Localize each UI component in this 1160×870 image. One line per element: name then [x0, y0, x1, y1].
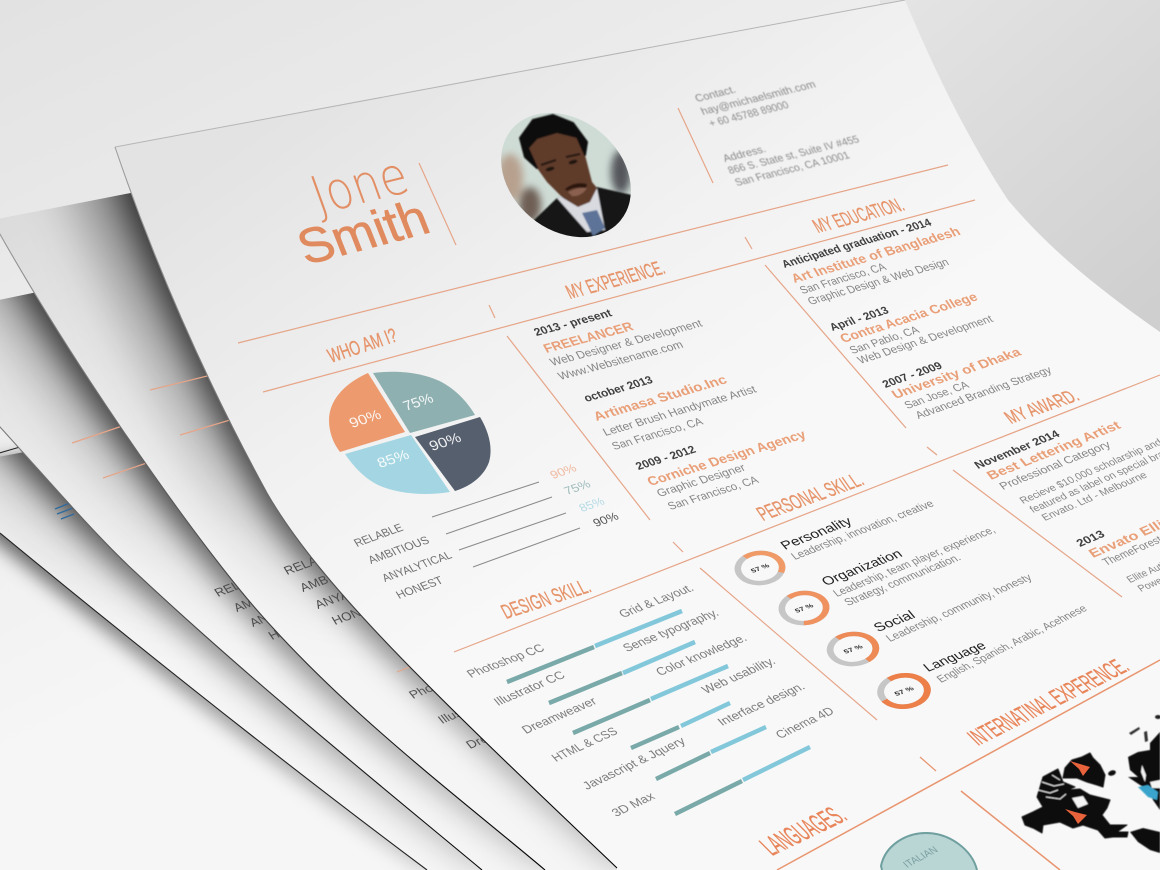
- education list: Anticipated graduation - 2014: [779, 217, 934, 271]
- design skill bars: [507, 611, 810, 814]
- back sheet 2: Photoshop: [406, 666, 473, 701]
- pie chart: 75%: [401, 391, 436, 414]
- section rules: [238, 165, 1160, 870]
- profile photo: [501, 113, 631, 238]
- experience list: FREELANCER: [541, 319, 636, 356]
- education list: Web Design & Development: [855, 313, 996, 366]
- language bubble: italian: [881, 833, 977, 870]
- trait list: AMBITIOUS: [365, 534, 432, 566]
- education list: Art Institute of Bangladesh: [788, 224, 963, 286]
- experience list: [532, 307, 809, 513]
- design skill labels: Interface design.: [714, 679, 808, 728]
- donut: personality: 57 %: [749, 562, 771, 574]
- back sheet 2: [0, 193, 604, 870]
- design skill labels: Illustrator CC: [490, 668, 568, 708]
- personal skill list: [777, 498, 1090, 685]
- trait list: [351, 461, 621, 601]
- donut: language: 57 %: [893, 685, 916, 698]
- name: Smith: [289, 189, 437, 275]
- education list: San Pablo, CA: [847, 324, 922, 356]
- heading: personal skill: PERSONAL SKILL.: [752, 468, 868, 525]
- ghost rows: blue: [55, 503, 74, 519]
- award list: Professional Category: [997, 439, 1114, 492]
- experience list: Corniche Design Agency: [644, 427, 809, 489]
- back sheet 2: Illustrator: [435, 694, 494, 726]
- design skill labels: Web usability.: [698, 654, 778, 696]
- experience list: october 2013: [582, 374, 656, 405]
- pie chart: 90%: [347, 408, 384, 431]
- education list: San Jose, CA: [902, 379, 972, 411]
- award list: [972, 418, 1160, 594]
- experience list: Graphic Designer: [654, 462, 748, 500]
- design skill labels: 3D Max: [608, 789, 658, 819]
- personal skill list: Strategy, communication.: [842, 552, 964, 608]
- experience list: Artimasa Studio.Inc: [591, 372, 730, 424]
- name: [289, 144, 437, 275]
- education list: Contra Acacia College: [837, 290, 981, 345]
- experience list: Letter Brush Handymate Artist: [601, 383, 759, 439]
- donut: organization: 57 %: [793, 602, 815, 614]
- heading: my experience: MY EXPERIENCE.: [562, 257, 669, 303]
- donut: social: 57 %: [842, 643, 865, 655]
- personal skill list: Leadership, team player, experience,: [831, 524, 998, 599]
- back sheet 3: AMBITIOUS: [230, 577, 305, 614]
- contact details: 866 S. State st, Suite IV #455: [726, 134, 861, 177]
- experience list: 2013 - present: [532, 307, 614, 339]
- trait list: 90%: [590, 510, 621, 529]
- trait list: 75%: [561, 477, 593, 497]
- heading: who am i: WHO AM I?: [325, 324, 400, 368]
- back sheet 2: RELABLE: [281, 545, 344, 578]
- experience list: Web Designer & Development: [548, 317, 705, 369]
- education list: [779, 217, 1054, 421]
- design skill labels: Grid & Layout.: [615, 581, 697, 620]
- contact divider: [678, 108, 713, 183]
- award list: 2013: [1074, 528, 1108, 549]
- donut: organization: [768, 583, 840, 633]
- contact details: San Francisco, CA 10001: [733, 150, 852, 189]
- donut: personality: [724, 543, 796, 593]
- back sheet 2: HONEST: [329, 596, 388, 628]
- education list: Advanced Branding Strategy: [913, 364, 1054, 421]
- pie chart: 90%: [427, 431, 464, 454]
- design skill labels: [463, 581, 837, 819]
- personal skill list: Social: [870, 608, 918, 634]
- design skill labels: Sense typography.: [619, 606, 722, 654]
- pie chart: [329, 372, 491, 494]
- personal skill list: Leadership, innovation, creative: [789, 498, 937, 562]
- language bubble: italian: ITALIAN: [901, 845, 941, 870]
- design skill labels: Photoshop CC: [463, 641, 547, 680]
- map pin: south: [1065, 809, 1087, 824]
- contact details: [693, 79, 861, 189]
- map pin: north: [1070, 761, 1090, 776]
- heading: my award: MY AWARD.: [1000, 386, 1084, 428]
- donut: social: [816, 624, 890, 674]
- experience list: 2009 - 2012: [633, 443, 699, 473]
- shadow on table: [0, 406, 793, 870]
- back sheet 3: [0, 292, 530, 870]
- personal skill list: Language: [920, 639, 990, 674]
- personal skill list: English, Spanish, Arabic, Acehnese: [934, 603, 1090, 685]
- experience list: San Francisco, CA: [610, 416, 705, 453]
- back sheet 2: AMBITIOUS: [297, 558, 372, 595]
- personal skill list: Leadership, community, honesty: [883, 572, 1035, 644]
- experience list: Www.Websitename.com: [556, 339, 686, 383]
- world map: [1022, 715, 1160, 853]
- pie chart: 85%: [375, 448, 412, 471]
- back sheet 4: [0, 447, 474, 870]
- map pin: blue region: [1138, 785, 1158, 800]
- design skill labels: Dreamweaver: [518, 694, 600, 736]
- education list: 2007 - 2009: [880, 360, 945, 390]
- heading: languages: LANGUAGES.: [754, 801, 854, 861]
- experience list: San Francisco, CA: [665, 474, 761, 513]
- heading: my education: MY EDUCATION.: [809, 194, 909, 237]
- design skill labels: HTML & CSS: [548, 724, 621, 764]
- trait list: ANYALYTICAL: [379, 548, 455, 584]
- name divider: [419, 163, 456, 245]
- award list: Best Lettering Artist: [984, 418, 1124, 482]
- award list: Envato. Ltd - Melbourne: [1039, 470, 1150, 523]
- contact details: Contact.: [693, 84, 738, 105]
- education list: April - 2013: [827, 304, 892, 333]
- trait list: 90%: [547, 461, 579, 481]
- back sheet 2: ANYALYTICAL: [312, 570, 401, 612]
- trait list: 85%: [576, 495, 607, 514]
- back sheet 3: ANYALYTICAL: [246, 586, 335, 629]
- personal skill list: Personality: [777, 514, 855, 552]
- contact details: hay@michaelsmith.com: [699, 79, 818, 118]
- name: Jone: [302, 144, 416, 226]
- contact details: Address.: [721, 144, 768, 165]
- trait list: HONEST: [393, 573, 446, 601]
- education list: Graphic Design & Web Design: [805, 256, 951, 308]
- heading: design skill: DESIGN SKILL.: [497, 574, 595, 623]
- design skill labels: Cinema 4D: [772, 704, 837, 741]
- personal skill list: Organization: [818, 547, 905, 588]
- education list: San Francisco, CA: [797, 261, 889, 297]
- trait list: RELABLE: [351, 521, 406, 549]
- design skill labels: Javascript & Jquery: [579, 734, 689, 792]
- design skill labels: Color knowledge.: [652, 631, 750, 678]
- education list: University of Dhaka: [889, 345, 1024, 401]
- donut: language: [867, 666, 941, 716]
- award list: November 2014: [972, 428, 1063, 471]
- back sheet 2: Dreamweaver: [463, 709, 548, 751]
- contact details: + 60 45788 89000: [707, 100, 791, 130]
- back sheet 3: RELABLE: [211, 566, 274, 599]
- back sheet 3: HONEST: [265, 611, 324, 642]
